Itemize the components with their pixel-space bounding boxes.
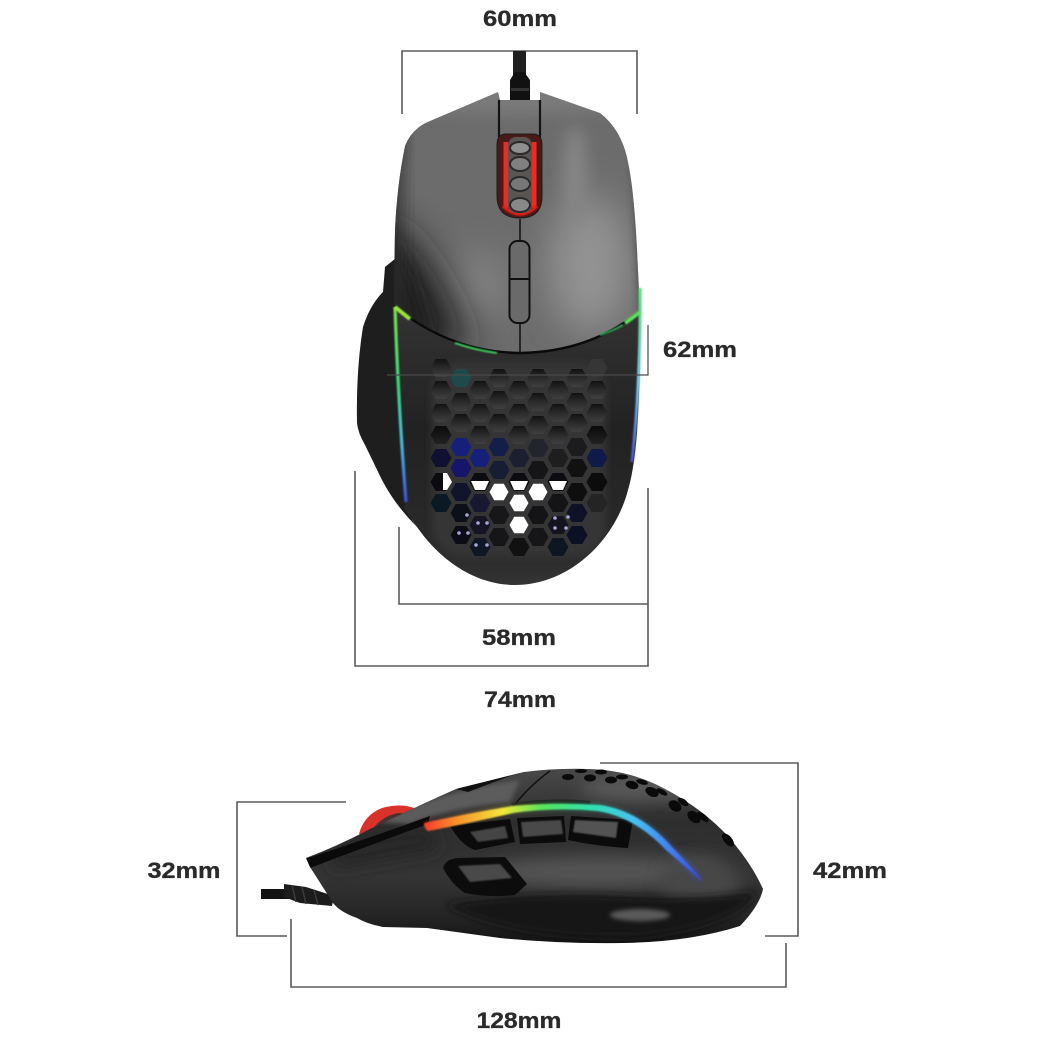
60mm dimension bracket xyxy=(402,51,637,114)
58mm dimension bracket xyxy=(399,488,648,604)
side-view mouse xyxy=(261,769,763,943)
upper shell xyxy=(394,92,640,352)
RGB light glow xyxy=(426,806,701,880)
DPI button xyxy=(510,219,530,353)
32mm label: 32mm xyxy=(148,858,220,883)
seam between buttons and palm shell xyxy=(394,306,640,353)
62mm label: 62mm xyxy=(663,337,737,362)
red scroll wheel xyxy=(359,806,420,836)
RGB light strip xyxy=(424,804,702,881)
scroll wheel window xyxy=(497,134,542,218)
ventilation holes xyxy=(562,769,736,849)
58mm label: 58mm xyxy=(482,625,556,650)
hexagon grid xyxy=(430,359,608,556)
center channel xyxy=(499,100,540,137)
side buttons xyxy=(450,816,633,850)
screw posts xyxy=(457,513,570,547)
74mm label: 74mm xyxy=(484,687,556,712)
dark lower hexagons xyxy=(430,473,608,556)
white see-through hexagons xyxy=(443,473,567,533)
right RGB strip xyxy=(632,288,640,462)
left RGB strip xyxy=(395,307,406,502)
60mm label: 60mm xyxy=(483,6,557,31)
green arc glow xyxy=(395,307,640,353)
cable xyxy=(261,884,334,906)
thumb button highlight xyxy=(458,864,512,882)
cable xyxy=(510,51,530,100)
blue-tinted hexagons xyxy=(430,438,608,479)
upper hexagons xyxy=(430,359,608,444)
top-view mouse xyxy=(357,51,650,590)
74mm dimension bracket xyxy=(355,471,648,666)
32mm dimension bracket xyxy=(237,802,346,936)
62mm dimension bracket xyxy=(387,325,648,375)
thumb button xyxy=(443,857,527,896)
128mm label: 128mm xyxy=(476,1008,562,1033)
mouse body xyxy=(306,769,763,943)
42mm dimension bracket xyxy=(600,763,798,936)
body shading xyxy=(305,771,756,938)
side wing xyxy=(357,258,417,527)
lower shell xyxy=(396,312,640,585)
42mm label: 42mm xyxy=(813,858,887,883)
128mm dimension bracket xyxy=(291,919,786,987)
